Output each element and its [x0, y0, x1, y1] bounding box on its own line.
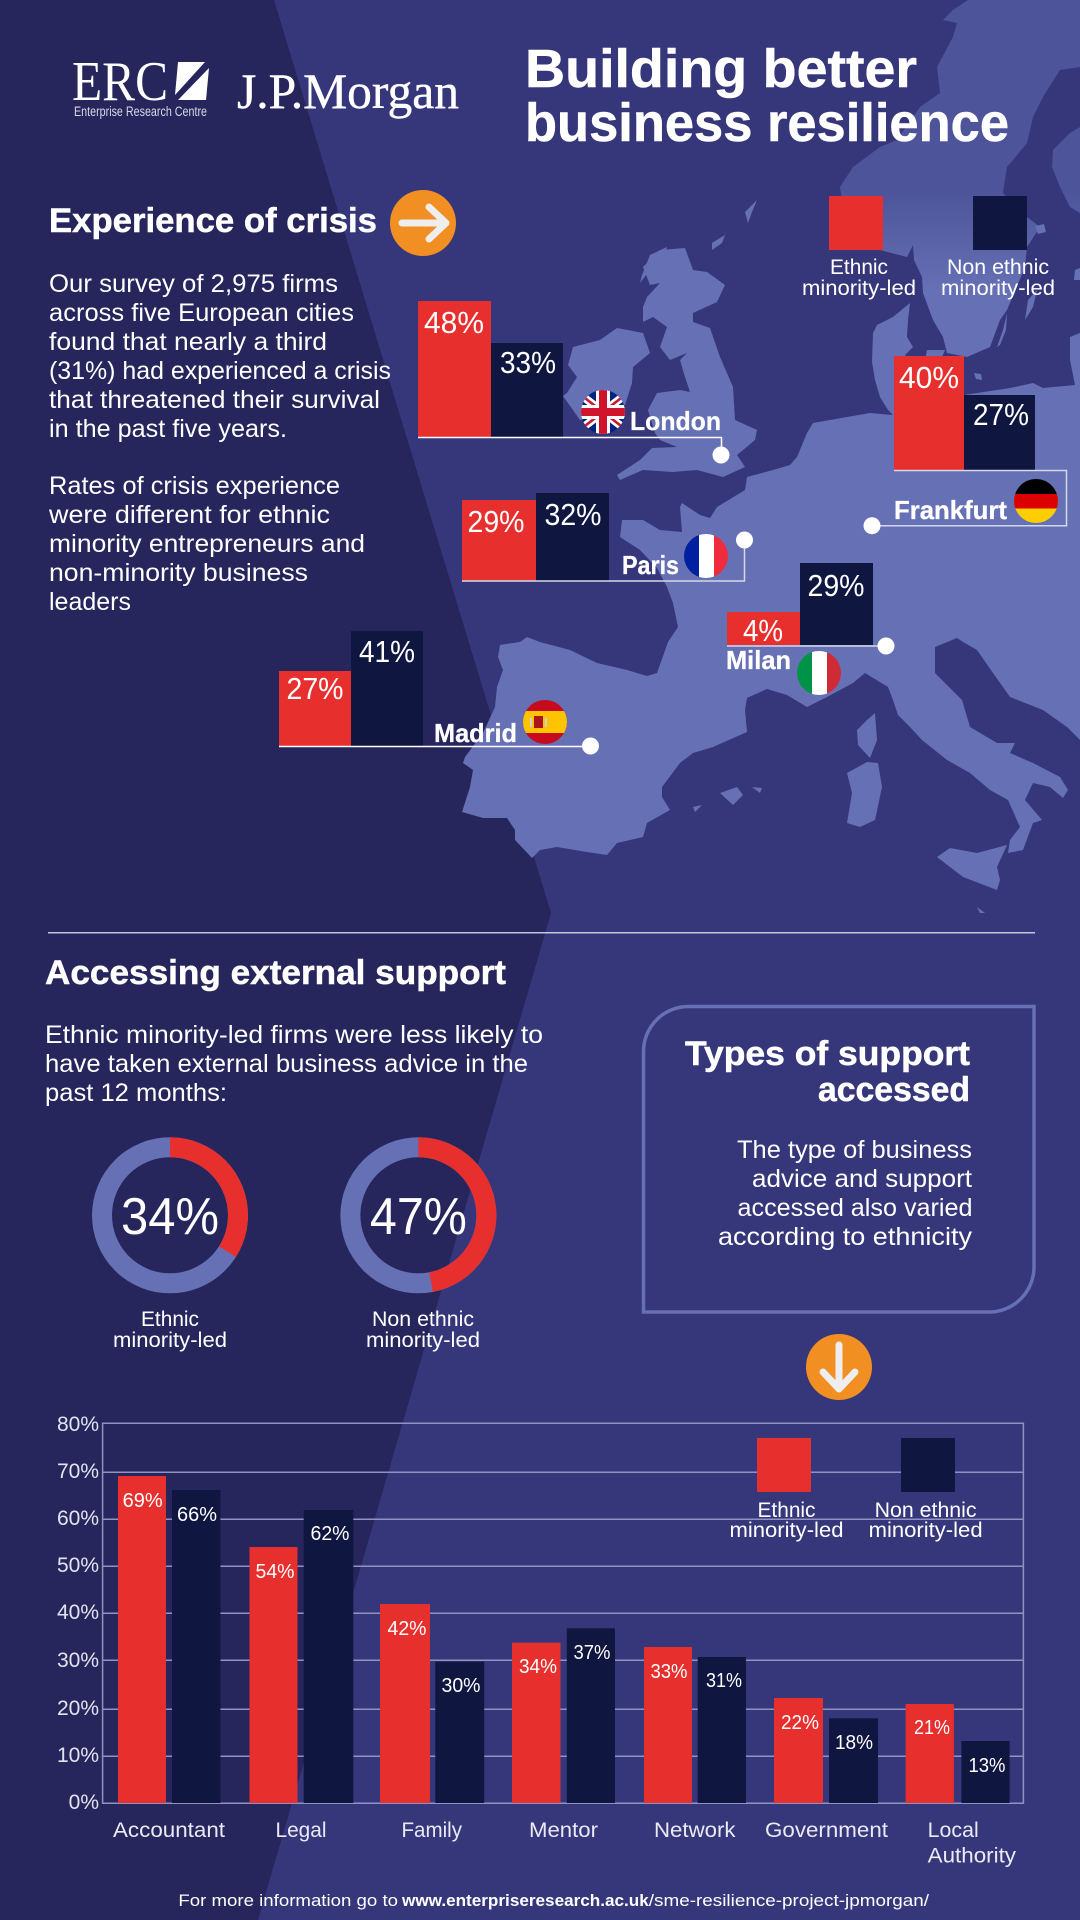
legend: map: minority-led	[941, 277, 1055, 300]
category labels: Accountant	[113, 1819, 225, 1842]
bar value labels: 62%	[310, 1523, 350, 1545]
footer: /sme-resilience-project-jpmorgan/	[649, 1891, 929, 1910]
bar value labels	[123, 1490, 1006, 1777]
chart: Paris	[462, 493, 753, 581]
ethnic minority-led bars	[118, 1476, 954, 1803]
bar value labels: 37%	[574, 1642, 611, 1664]
label: ethnic minority-led: Ethnic	[141, 1308, 199, 1331]
legend: chart: minority-led	[730, 1519, 844, 1542]
text block: rates of crisis: minority entrepreneurs and	[49, 530, 365, 558]
logo: J.P.Morgan: J.P.Morgan	[237, 63, 459, 119]
category labels: Family	[402, 1819, 462, 1842]
donut: ethnic minority-led 34%	[102, 1147, 238, 1283]
text block: survey intro	[49, 270, 391, 443]
logo: ERC: Enterprise Research Centre	[74, 104, 207, 119]
legend: chart	[730, 1438, 983, 1542]
label: non ethnic minority-led	[366, 1308, 480, 1352]
chart: Frankfurt: Frankfurt	[894, 495, 1007, 525]
heading: accessing external support: Accessing external support	[45, 954, 506, 992]
divider	[48, 932, 1035, 934]
text block: survey intro: found that nearly a third	[49, 328, 327, 356]
chart: Milan: Milan	[726, 645, 791, 675]
text block: rates of crisis	[48, 472, 365, 616]
chart: Milan: 4%	[743, 613, 783, 648]
title: Building better	[525, 39, 917, 99]
y axis labels: 40%	[57, 1601, 99, 1624]
icon: down arrow	[806, 1334, 872, 1400]
text block: rates of crisis: were different for ethnic	[48, 501, 330, 529]
chart: London: London	[630, 406, 721, 436]
legend: chart: minority-led	[869, 1519, 983, 1542]
chart: Frankfurt	[864, 356, 1066, 534]
text block: type of advice: The type of business	[737, 1136, 972, 1164]
text block: rates of crisis: Rates of crisis experience	[49, 472, 340, 500]
background: dark angled panel	[0, 0, 551, 1920]
category labels: Legal	[276, 1819, 326, 1842]
bar value labels: 21%	[914, 1717, 950, 1739]
text block: type of advice: according to ethnicity	[718, 1223, 973, 1251]
donut: non ethnic minority-led 47%: 47%	[370, 1188, 467, 1246]
grid lines	[103, 1423, 1023, 1803]
icon: Spanish flag	[523, 700, 567, 744]
footer: www.enterpriseresearch.ac.uk	[401, 1891, 649, 1910]
chart: Frankfurt: 27%	[973, 397, 1029, 432]
icon: UK flag	[581, 390, 625, 434]
bar value labels: 22%	[781, 1712, 819, 1734]
donut: ethnic minority-led 34%: 34%	[121, 1188, 219, 1246]
text block: survey intro: that threatened their survival	[49, 386, 380, 414]
text block: survey intro: in the past five years.	[49, 415, 287, 443]
chart: London: 48%	[424, 305, 484, 340]
category labels: Network	[654, 1819, 736, 1842]
category labels: Local	[928, 1819, 979, 1842]
icon: Italian flag	[797, 651, 841, 695]
y axis labels	[57, 1413, 99, 1814]
y axis labels: 20%	[57, 1697, 99, 1720]
legend: map: Non ethnic	[947, 256, 1049, 279]
chart: Paris: 32%	[544, 497, 602, 532]
text block: external advice	[45, 1021, 543, 1107]
icon: right arrow	[390, 190, 456, 256]
title: business resilience	[525, 93, 1009, 153]
bar chart: types of support	[57, 1413, 1023, 1867]
text block: external advice: past 12 months:	[45, 1079, 227, 1107]
category labels: Authority	[928, 1844, 1017, 1867]
heading: types of support accessed: Types of support	[685, 1035, 970, 1073]
text block: survey intro: (31%) had experienced a crisis	[49, 357, 391, 385]
chart: Madrid: 27%	[286, 671, 344, 706]
category labels: Mentor	[529, 1819, 598, 1842]
bar value labels: 33%	[650, 1661, 688, 1683]
bar value labels: 69%	[123, 1490, 163, 1512]
text block: external advice: have taken external business advice in the	[45, 1050, 528, 1078]
chart: Madrid	[279, 631, 599, 754]
text block: type of advice: accessed also varied	[738, 1194, 972, 1222]
chart: Milan: 29%	[808, 568, 864, 603]
chart: Madrid: Madrid	[434, 718, 517, 748]
footer	[178, 1891, 929, 1910]
bar value labels: 34%	[519, 1656, 557, 1678]
footer: For more information go to	[178, 1891, 398, 1910]
text block: survey intro: across five European cities	[49, 299, 354, 327]
bar value labels: 18%	[835, 1732, 873, 1754]
icon: German flag	[1014, 479, 1058, 524]
y axis labels: 80%	[57, 1413, 99, 1436]
chart: Frankfurt: 40%	[899, 360, 959, 395]
panel: types of support	[644, 1006, 1034, 1312]
category labels: Government	[765, 1819, 888, 1842]
chart: Madrid: 41%	[359, 634, 415, 669]
chart: Milan	[726, 563, 894, 695]
label: ethnic minority-led: minority-led	[113, 1329, 227, 1352]
heading: types of support accessed: accessed	[818, 1071, 970, 1109]
label: non ethnic minority-led: minority-led	[366, 1329, 480, 1352]
legend: map: minority-led	[802, 277, 916, 300]
icon: French flag	[684, 534, 728, 578]
y axis labels: 50%	[57, 1554, 99, 1577]
legend: map: Ethnic	[830, 256, 888, 279]
bar value labels: 66%	[177, 1504, 217, 1526]
title	[525, 39, 1009, 153]
chart: London: 33%	[500, 345, 556, 380]
chart: Paris: 29%	[468, 504, 524, 539]
non ethnic minority-led bars	[172, 1490, 1010, 1803]
bar value labels: 54%	[256, 1561, 295, 1583]
chart: London	[418, 301, 730, 464]
map of Europe	[462, 0, 1080, 913]
bar value labels: 31%	[706, 1670, 742, 1692]
logo: ERC: ERC	[72, 51, 168, 113]
category labels	[113, 1819, 1017, 1867]
legend: map	[802, 196, 1055, 300]
bar value labels: 13%	[968, 1755, 1006, 1777]
text block: survey intro: Our survey of 2,975 firms	[49, 270, 338, 298]
donut: non ethnic minority-led 47%	[350, 1147, 486, 1283]
y axis labels: 70%	[57, 1460, 99, 1483]
legend: chart: Ethnic	[758, 1499, 816, 1522]
y axis labels: 0%	[69, 1791, 99, 1814]
text block: type of advice: advice and support	[752, 1165, 972, 1193]
label: ethnic minority-led	[113, 1308, 227, 1352]
chart: Paris: Paris	[622, 550, 679, 580]
y axis labels: 30%	[57, 1649, 99, 1672]
text block: external advice: Ethnic minority-led firms were less likely to	[45, 1021, 543, 1049]
heading: experience of crisis: Experience of crisis	[49, 202, 377, 240]
label: non ethnic minority-led: Non ethnic	[372, 1308, 474, 1331]
legend: chart: Non ethnic	[875, 1499, 977, 1522]
y axis labels: 60%	[57, 1507, 99, 1530]
y axis labels: 10%	[57, 1744, 99, 1767]
text block: rates of crisis: leaders	[49, 588, 131, 616]
text block: type of advice	[718, 1136, 973, 1251]
text block: rates of crisis: non-minority business	[49, 559, 308, 587]
bar value labels: 42%	[388, 1618, 427, 1640]
bar value labels: 30%	[442, 1675, 481, 1697]
heading: types of support accessed	[685, 1035, 970, 1109]
